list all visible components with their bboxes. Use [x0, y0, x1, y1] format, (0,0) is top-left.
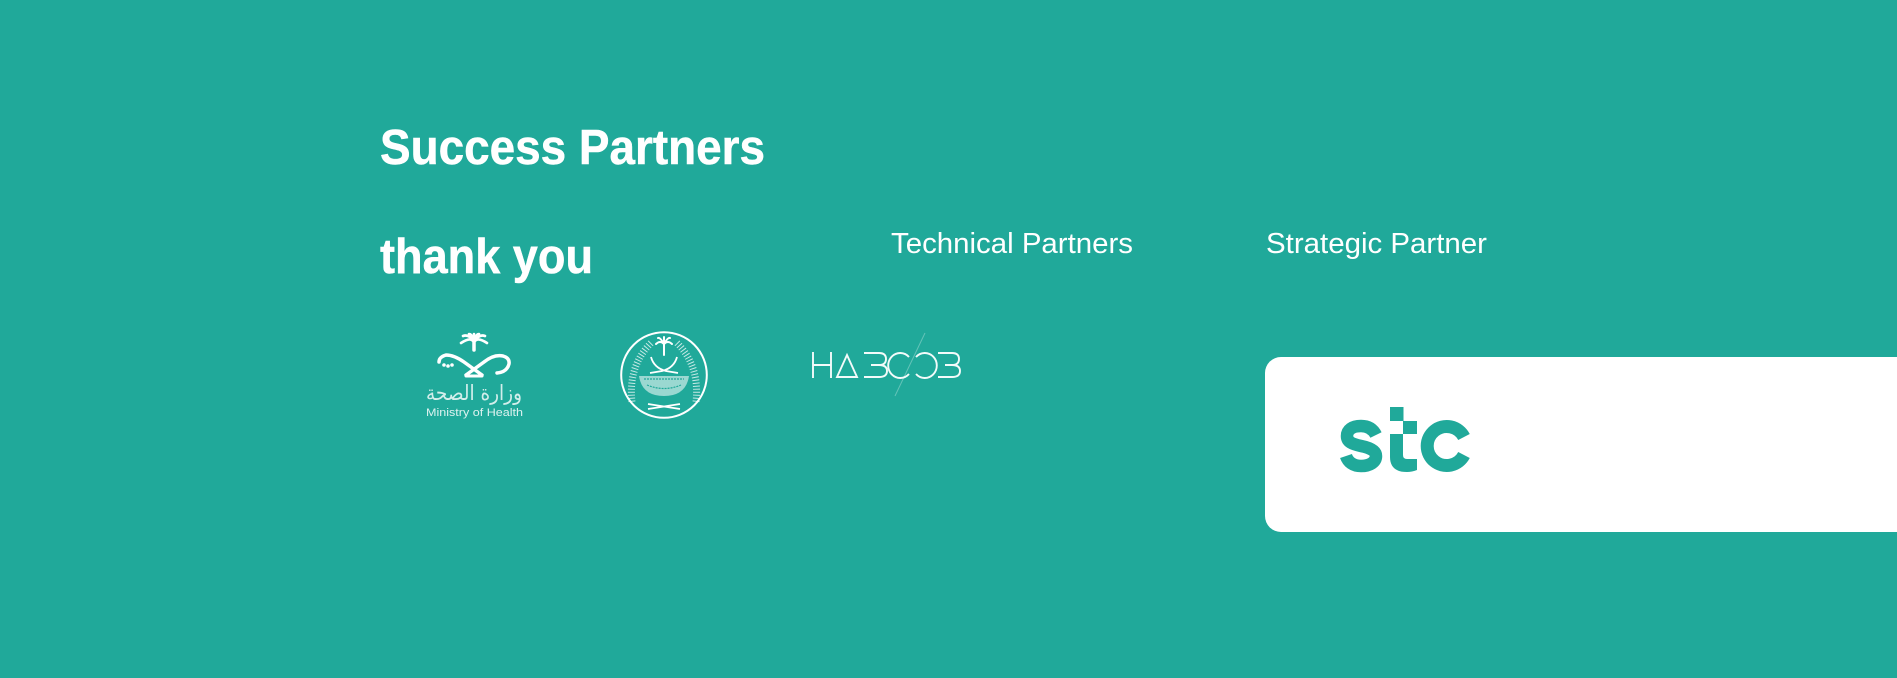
- label: Technical Partners: Technical Partners: [891, 228, 1133, 260]
- logo: government emblem: [621, 332, 707, 418]
- haboob left O: [888, 353, 909, 378]
- emblem swords: [650, 357, 678, 373]
- logo: Ministry of Health: [426, 334, 523, 419]
- haboob right O: [916, 353, 937, 378]
- haboob H: [813, 352, 831, 378]
- letter s: [1346, 426, 1376, 466]
- haboob triangle: [837, 355, 857, 377]
- logo: HABOOB: [813, 333, 960, 396]
- emblem arch: [639, 376, 689, 396]
- logo: stc: [1346, 407, 1464, 472]
- letter t: [1390, 407, 1417, 472]
- emblem wreath right: [677, 343, 697, 402]
- english name: Ministry of Health: [426, 407, 523, 419]
- emblem wreath left: [631, 343, 651, 402]
- haboob last B: [938, 353, 960, 377]
- emblem palm crown: [656, 337, 672, 355]
- heading: Success Partners: Success Partners: [380, 121, 765, 175]
- icon: crossed swords: [439, 355, 509, 376]
- label: Strategic Partner: Strategic Partner: [1266, 228, 1487, 260]
- icon: palm tree: [461, 334, 487, 350]
- haboob B: [864, 353, 887, 377]
- panel: strategic partner card: [1265, 357, 1897, 532]
- emblem base: [648, 404, 680, 409]
- emblem arch pattern: [644, 379, 684, 388]
- arabic name: وزارة الصحة: [426, 381, 522, 405]
- haboob slash: [895, 333, 925, 396]
- heading: thank you: thank you: [380, 230, 593, 284]
- emblem ring: [621, 332, 707, 418]
- letter c: [1427, 427, 1464, 466]
